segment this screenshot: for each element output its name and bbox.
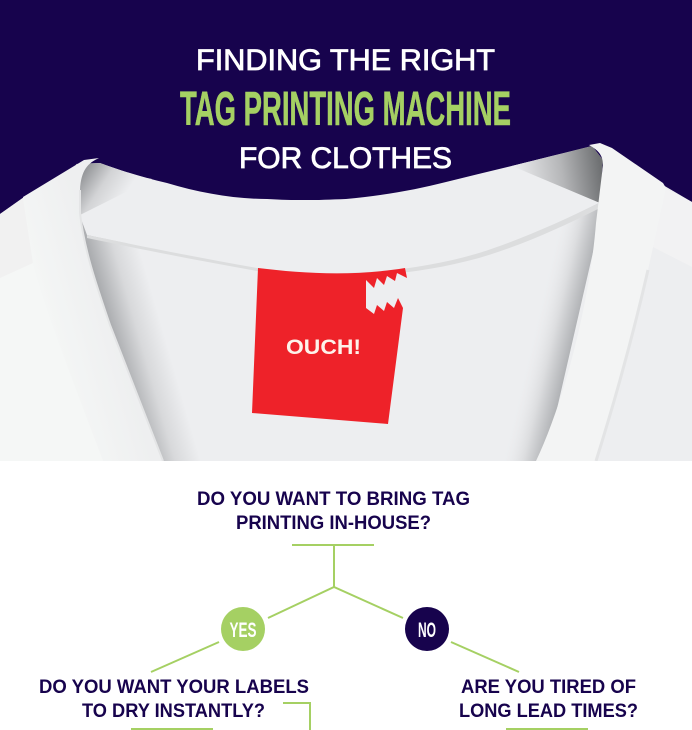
question: long lead times: LONG LEAD TIMES? [459,701,638,722]
shirt body left [0,197,170,461]
white flowchart background [0,461,692,730]
title: FINDING THE RIGHT [196,44,495,77]
yes badge [221,607,265,651]
back collar shading right [512,146,603,203]
right collar edge [596,270,648,461]
header background [0,0,692,300]
fabric patch right [653,187,692,267]
left collar edge [80,190,163,461]
tag text: OUCH! [286,335,361,359]
question: labels dry instantly [39,677,309,722]
question: long lead times [459,677,638,722]
flow connector lines [131,545,588,730]
question: labels dry instantly: DO YOU WANT YOUR LABELS [39,677,309,698]
fabric patch left [0,198,33,278]
title: FOR CLOTHES [239,142,452,175]
question: bring tag printing in-house: DO YOU WANT TO BRING TAG [197,489,470,510]
shirt illustration [0,143,692,461]
yes badge: YES [230,619,256,642]
back collar shading left [74,163,152,215]
question: labels dry instantly: TO DRY INSTANTLY? [82,701,265,722]
shirt body right [530,185,692,461]
back collar under shadow [87,203,599,276]
back collar band [74,146,603,273]
question: bring tag printing in-house [197,489,470,534]
left collar [23,158,163,461]
no badge [405,607,449,651]
no badge: NO [418,619,436,642]
right collar [536,143,666,461]
question: bring tag printing in-house: PRINTING IN-HOUSE? [236,513,431,534]
red tag [252,268,407,424]
title [180,44,511,175]
neck interior [70,200,605,461]
question: long lead times: ARE YOU TIRED OF [461,677,636,698]
